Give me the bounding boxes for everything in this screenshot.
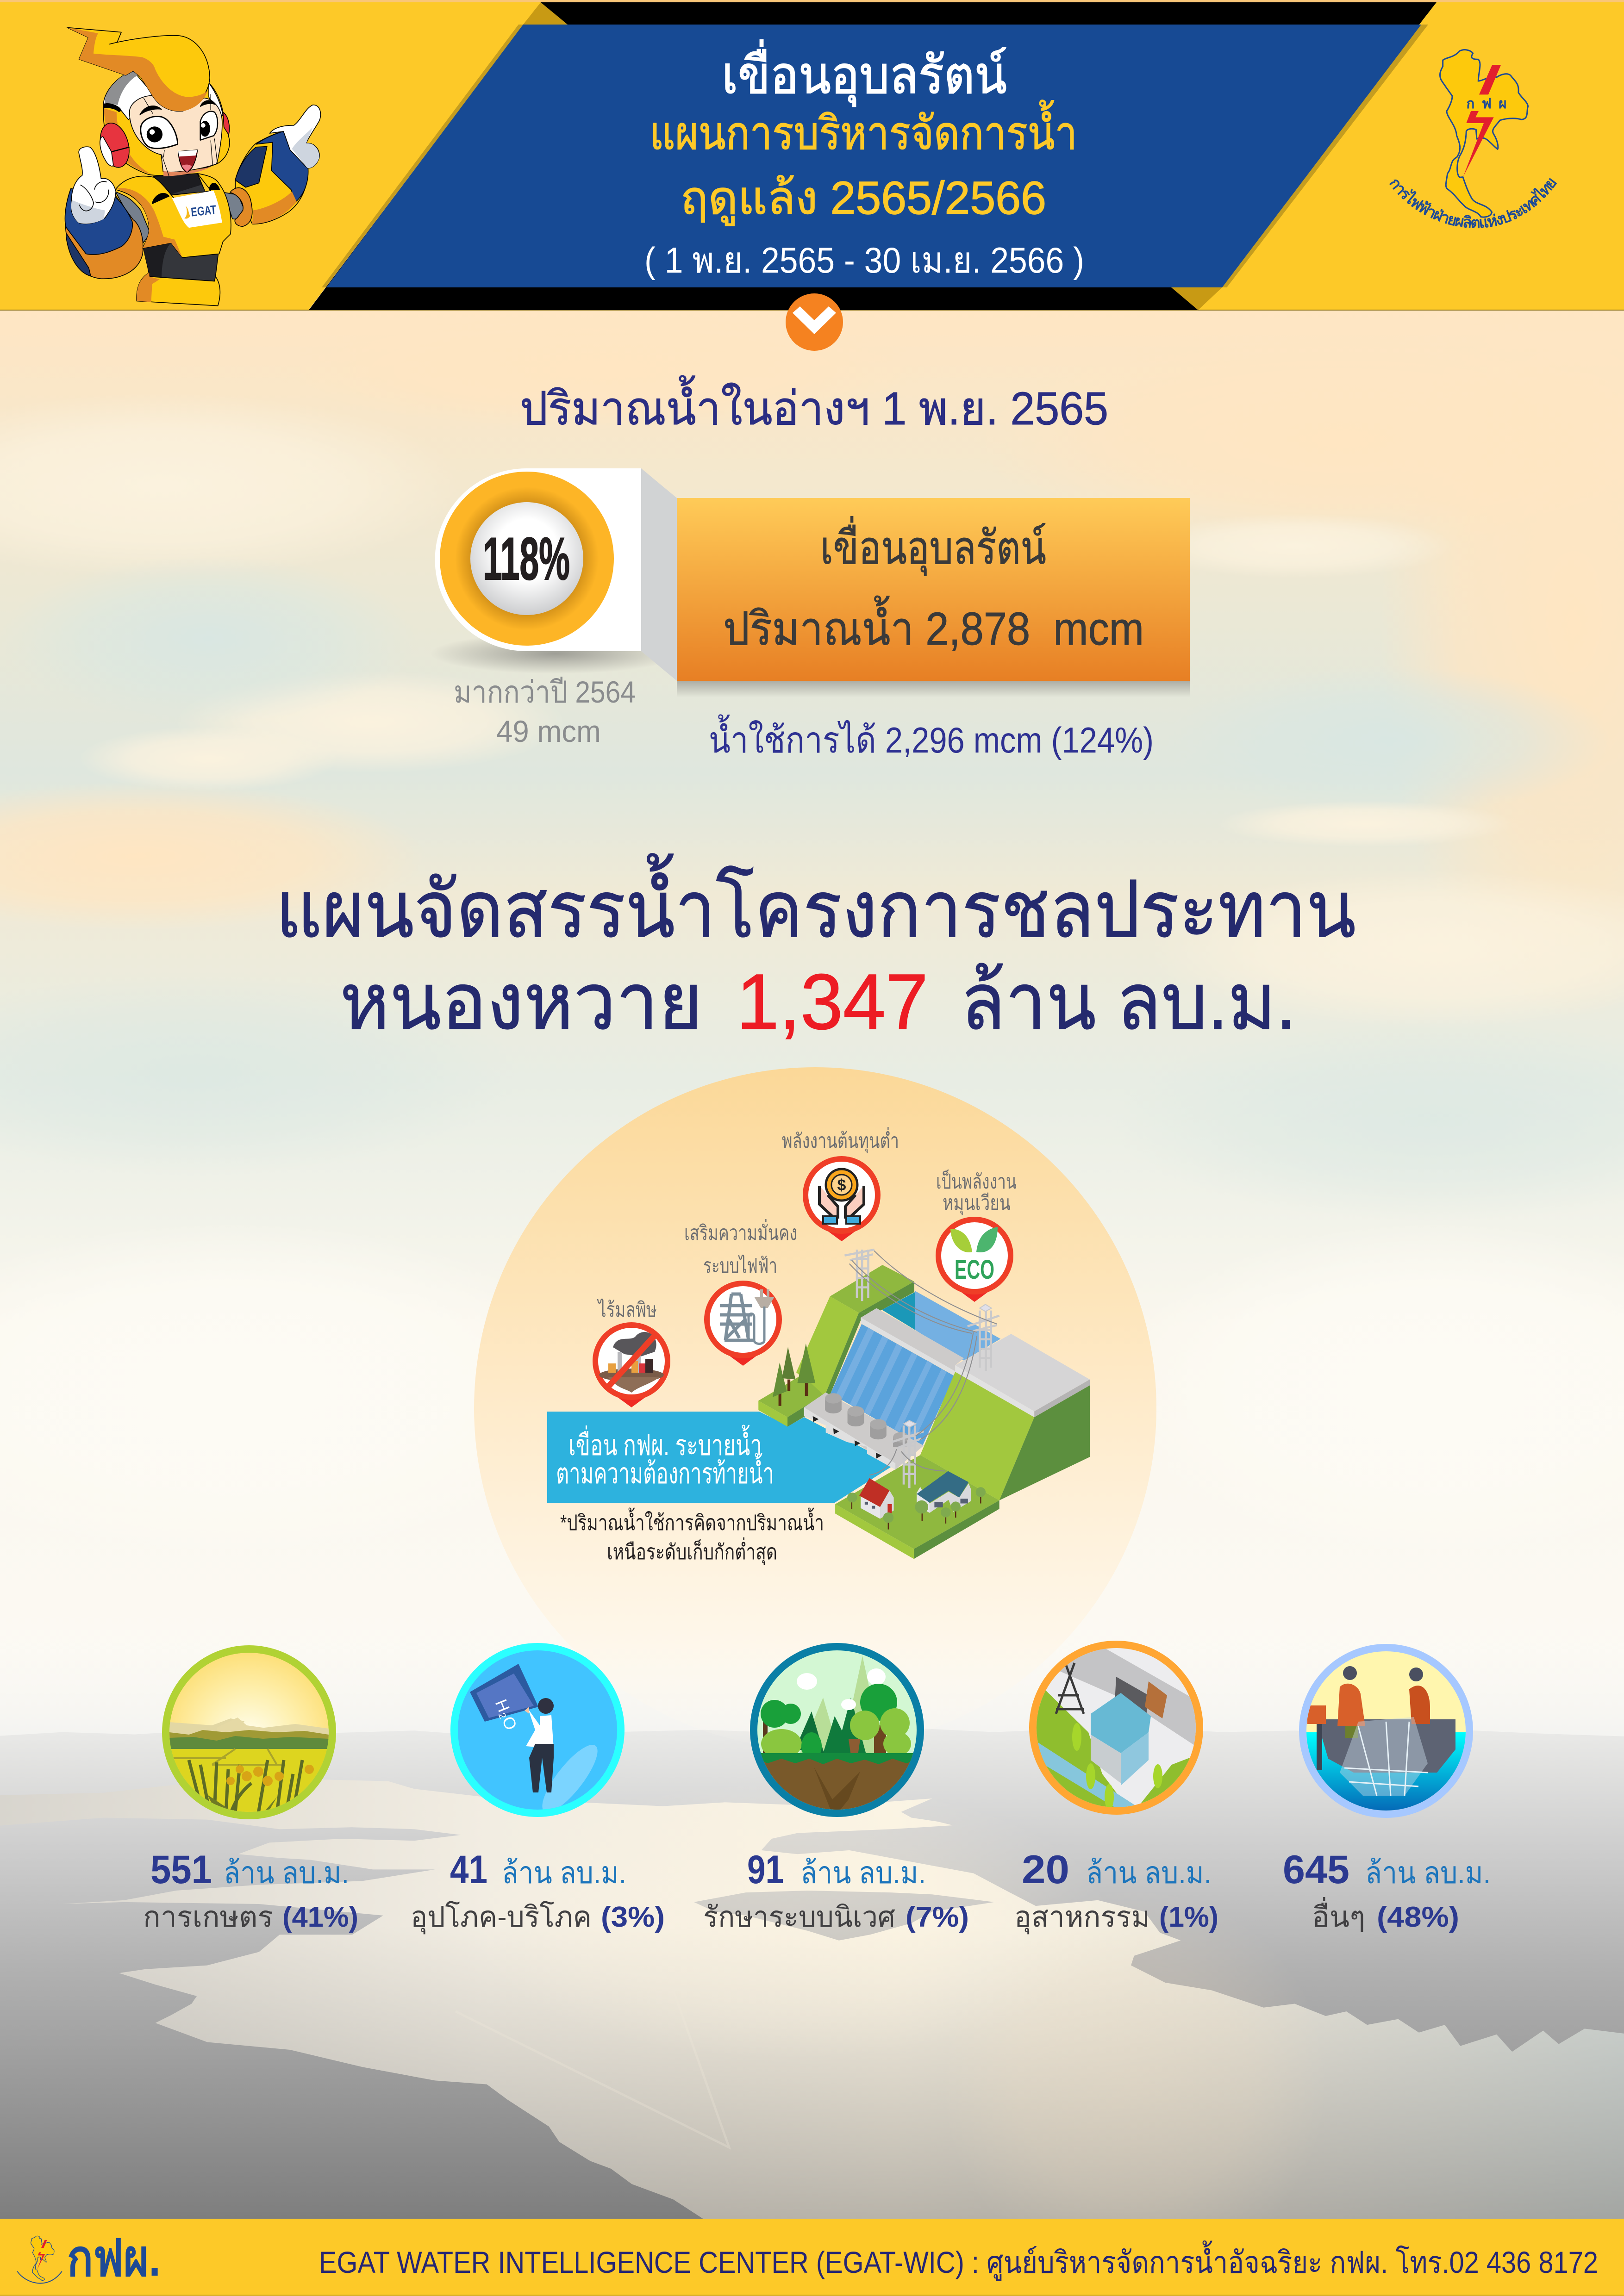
title: ฤดูแล้ง 2565/2566 (681, 172, 1046, 226)
title (644, 39, 1084, 280)
pin: low cost energy (806, 1159, 878, 1241)
gate deck (804, 1393, 924, 1470)
fold side (641, 468, 677, 681)
back hill (830, 1265, 914, 1313)
comparison with last year: มากกว่าปี 2564 (454, 675, 636, 709)
icon: consumption: H₂O (492, 1697, 521, 1733)
pin: renewable energy: ECO (955, 1255, 994, 1285)
pin label: low cost: พลังงานต้นทุนต่ำ (782, 1126, 899, 1153)
stat: ecosystem: รักษาระบบนิเวศ (703, 1901, 895, 1933)
gauge value: 118% (483, 525, 570, 592)
pin label: renewable: เป็นพลังงาน (936, 1170, 1017, 1193)
title: แผนการบริหารจัดการน้ำ (650, 100, 1077, 159)
towers (844, 1250, 999, 1488)
stat: industry: 20 (1022, 1848, 1069, 1892)
pin label: grid stability: ระบบไฟฟ้า (703, 1254, 777, 1277)
pin: no pollution (595, 1325, 668, 1407)
stat: consumption: ล้าน ลบ.ม. (502, 1855, 626, 1890)
stat: agriculture: ล้าน ลบ.ม. (224, 1855, 349, 1890)
title: ( 1 พ.ย. 2565 - 30 เม.ย. 2566 ) (644, 240, 1084, 280)
stat: others: (48%) (1377, 1901, 1459, 1933)
stat: others: ล้าน ลบ.ม. (1365, 1855, 1491, 1890)
banner text: เขื่อน กฟผ. ระบายน้ำ (568, 1425, 762, 1462)
stat: consumption: 41 (450, 1848, 487, 1892)
water banner (547, 1412, 894, 1503)
stat: ecosystem (703, 1848, 969, 1933)
yellow left panel (0, 2, 541, 310)
mascot lower body (137, 243, 220, 306)
blue title panel (326, 25, 1421, 287)
title: เขื่อนอุบลรัตน์ (722, 39, 1007, 107)
red house (859, 1478, 894, 1519)
panel: reservoir volume (431, 468, 1190, 760)
tanks (825, 1393, 909, 1447)
box shadow (677, 681, 1190, 697)
yellow right panel (1198, 2, 1624, 310)
stat: ecosystem: (7%) (906, 1901, 969, 1933)
mascot right arm (224, 105, 321, 226)
main slopes (920, 1372, 1034, 1500)
mascot head (96, 71, 230, 176)
footnote: เหนือระดับเก็บกักต่ำสุด (607, 1537, 777, 1565)
mascot torso (115, 174, 231, 258)
footnote (560, 1507, 824, 1565)
heading: allocation plan (275, 853, 1356, 1046)
icon: ecosystem (750, 1643, 924, 1817)
comparison with last year: 49 mcm (496, 714, 601, 748)
pin: low cost energy: $ (837, 1176, 846, 1194)
stat: industry: อุสาหกรรม (1014, 1901, 1150, 1934)
mascot torso: EGAT (190, 203, 217, 219)
stat: others: อื่นๆ (1312, 1897, 1365, 1933)
white card with gauge (435, 468, 641, 651)
map outline (1440, 50, 1528, 217)
pin label: no pollution: ไร้มลพิษ (597, 1298, 657, 1321)
chevron button (786, 293, 843, 351)
black ribbon (309, 2, 1437, 310)
heading: water volume date: ปริมาณน้ำในอ่างฯ 1 พ.ย. 2565 (520, 375, 1108, 435)
heading: allocation plan: ล้าน ลบ.ม. (961, 958, 1296, 1046)
footnote: *ปริมาณน้ำใช้การคิดจากปริมาณน้ำ (560, 1507, 824, 1535)
stat: industry: ล้าน ลบ.ม. (1086, 1855, 1212, 1890)
pin label: grid stability: เสริมความมั่นคง (684, 1219, 797, 1244)
stat: ecosystem: 91 (747, 1848, 784, 1892)
power lines (849, 1251, 997, 1475)
mascot left arm (65, 147, 150, 279)
gauge inner disc (470, 502, 583, 615)
dam illustration (547, 1250, 1090, 1565)
pine trees (773, 1344, 815, 1406)
banner text (556, 1425, 774, 1490)
stat: agriculture (143, 1848, 358, 1933)
footer logo name: กฟผ. (67, 2230, 161, 2287)
stat: industry: (1%) (1159, 1901, 1218, 1933)
footer logo map (17, 2236, 62, 2284)
mascot hair bolt (67, 27, 210, 111)
blue house (917, 1471, 971, 1513)
lightning bolt (1463, 65, 1501, 177)
crest (861, 1308, 964, 1376)
header band (0, 0, 1624, 311)
dam name: เขื่อนอุบลรัตน์ (820, 516, 1046, 576)
stat: others (1283, 1848, 1491, 1933)
small trees (847, 1487, 986, 1530)
pin label: renewable (936, 1170, 1017, 1215)
volume: ปริมาณน้ำ 2,878 mcm (723, 596, 1144, 655)
logo arc text (1389, 183, 1557, 228)
stat: agriculture: การเกษตร (143, 1901, 273, 1933)
tree platform (758, 1375, 824, 1417)
pin label: grid stability (684, 1219, 797, 1277)
logo initials: กฟผ (1466, 96, 1507, 112)
banner text: ตามความต้องการท้ายน้ำ (556, 1453, 774, 1490)
icon: consumption (450, 1643, 625, 1819)
peach circle backdrop (474, 1067, 1156, 1749)
stat: agriculture: (41%) (282, 1901, 358, 1933)
footer (0, 2219, 1624, 2296)
comparison with last year (454, 675, 636, 748)
heading: allocation plan: แผนจัดสรรน้ำโครงการชลประทาน (275, 853, 1356, 954)
ribbon folds (523, 2, 568, 25)
card shadow (431, 633, 681, 674)
pin label: renewable: หมุนเวียน (943, 1192, 1011, 1215)
EGAT logo: Thailand map with lightning bolt: การไฟฟ้าฝ่ายผลิตแห่งประเทศไทย (1386, 174, 1561, 232)
pin: renewable energy (938, 1220, 1011, 1302)
gauge ring (440, 472, 614, 646)
mascot (65, 27, 321, 306)
spillway (831, 1324, 955, 1445)
heading: allocation plan: หนองหวาย (340, 958, 703, 1046)
stat: agriculture: 551 (150, 1848, 212, 1892)
stat: industry (1014, 1848, 1218, 1934)
blue panel soft edge (322, 25, 1428, 287)
orange box (677, 498, 1190, 681)
icon: fisheries and others (1299, 1644, 1473, 1818)
usable water: น้ำใช้การได้ 2,296 mcm (124%) (709, 714, 1154, 760)
stat: consumption (411, 1848, 665, 1934)
stat: consumption: (3%) (601, 1901, 665, 1933)
stat: consumption: อุปโภค-บริโภค (411, 1901, 592, 1934)
EGAT logo: Thailand map with lightning bolt (1386, 50, 1561, 232)
pin: power grid (707, 1283, 779, 1366)
stat: ecosystem: ล้าน ลบ.ม. (800, 1855, 926, 1890)
lower platform (835, 1455, 999, 1549)
stat: others: 645 (1283, 1848, 1349, 1892)
icon: industry (1029, 1641, 1203, 1815)
icon: agriculture (162, 1645, 336, 1819)
panel: water uses (143, 1641, 1491, 1934)
right platform (955, 1334, 1090, 1411)
reservoir (915, 1291, 1000, 1361)
heading: allocation plan: 1,347 (737, 958, 928, 1046)
